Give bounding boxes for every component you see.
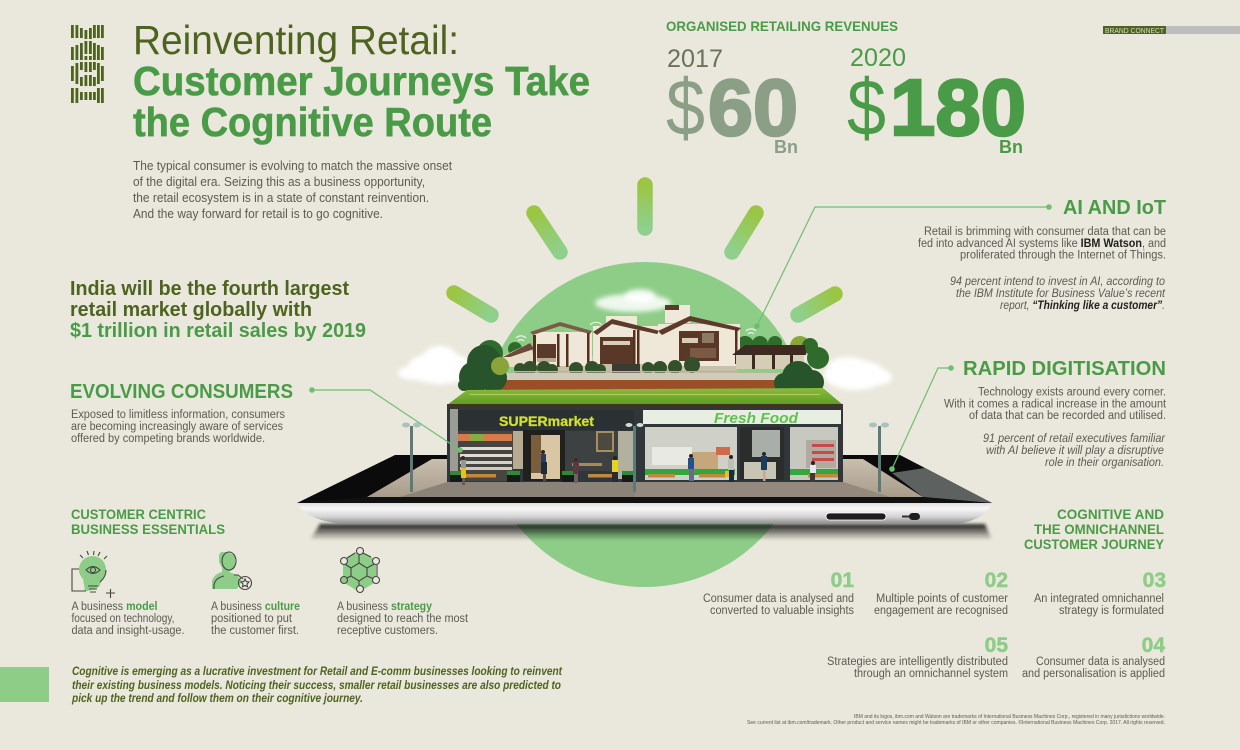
essentials: model: data and insight-usage. [72, 625, 184, 637]
revenue 2017: 2017 [667, 45, 723, 73]
step 05: 05 [985, 634, 1008, 657]
AI and IoT block [918, 197, 1166, 312]
revenue 2020 [847, 44, 1026, 157]
revenue 2017: $ [666, 63, 705, 152]
India market statement [70, 278, 366, 342]
entrance [523, 430, 565, 481]
grass roof [447, 388, 843, 408]
AI and IoT block: 94 percent intend to invest in AI, according to [950, 276, 1166, 288]
legal footer: See current list at ibm.com/trademark. Other product and service names might be trademarks of IBM or other companies. ©International Business Machines Corp. 2017. All rights reserved. [747, 719, 1165, 726]
trees front [458, 345, 824, 394]
essentials: strategy: designed to reach the most [337, 613, 469, 625]
supermarket sign [458, 410, 634, 430]
small left house [503, 343, 536, 367]
trees behind [477, 336, 829, 369]
intro text [133, 159, 452, 221]
revenues heading: ORGANISED RETAILING REVENUES [666, 18, 898, 34]
base wall [515, 356, 737, 374]
rapid digitisation block: With it comes a radical increase in the amount [944, 398, 1167, 410]
icon: light bulb with eye [72, 551, 115, 598]
step 03: 03 [1143, 569, 1166, 592]
icon: strategy hexagon network [340, 548, 380, 592]
omnichannel heading [1024, 507, 1164, 552]
revenue 2017 [666, 45, 798, 157]
title: the Cognitive Route [133, 99, 492, 145]
right window [790, 427, 838, 480]
shrubs [514, 357, 700, 376]
rapid digitisation block: role in their organisation. [1045, 457, 1164, 469]
step 02: Multiple points of customer [876, 593, 1008, 605]
planters and benches [450, 471, 634, 482]
fresh food sign: Fresh Food [714, 410, 799, 427]
AI and IoT block: report, “Thinking like a customer”. [1000, 300, 1165, 312]
closing statement: their existing business models. Noticing their success, smaller retail businesses are also predicted to [72, 680, 561, 692]
rapid digitisation block: Technology exists around every corner. [978, 386, 1166, 398]
step 04: and personalisation is applied [1022, 668, 1165, 680]
closing statement [71, 666, 563, 705]
brand connect tag [1103, 26, 1240, 35]
store building [400, 408, 890, 497]
AI and IoT block: proliferated through the Internet of Things. [960, 250, 1166, 262]
step 01: converted to valuable insights [710, 605, 854, 617]
revenue 2020: 2020 [850, 44, 906, 72]
essentials: strategy [337, 601, 469, 637]
intro text: the retail ecosystem is in a state of constant reinvention. [133, 191, 429, 205]
evolving consumers block: offered by competing brands worldwide. [71, 433, 265, 445]
shadow under tablet [310, 524, 992, 540]
revenue 2020: Bn [999, 137, 1023, 157]
brick bank [490, 380, 780, 391]
fresh food sign [643, 410, 841, 427]
brand connect tag: BRAND CONNECT [1105, 28, 1165, 35]
grocery shelves [458, 431, 513, 481]
evolving consumers block [70, 381, 293, 445]
intro text: of the digital era. Seizing this as a business opportunity, [133, 175, 425, 189]
step 05: through an omnichannel system [854, 668, 1008, 680]
India market statement: $1 trillion in retail sales by 2019 [70, 320, 366, 342]
India market statement: retail market globally with [70, 299, 312, 321]
sun circle [482, 262, 808, 587]
omnichannel heading: COGNITIVE AND [1057, 507, 1164, 522]
revenue 2017: Bn [774, 137, 798, 157]
AI and IoT block: fed into advanced AI systems like IBM Watson, and [918, 238, 1166, 250]
house three [658, 305, 741, 366]
evolving consumers block: are becoming increasingly aware of services [71, 421, 283, 433]
clouds [398, 289, 892, 390]
pavement [400, 482, 890, 497]
essentials: culture [211, 601, 300, 637]
step 03: An integrated omnichannel [1034, 593, 1164, 605]
left window [645, 427, 737, 480]
rapid digitisation block: with AI believe it will play a disruptive [986, 445, 1164, 457]
step 02: 02 [985, 569, 1008, 592]
closing statement: Cognitive is emerging as a lucrative investment for Retail and E-comm businesses looking to reinvent [72, 666, 563, 678]
step 03 [1034, 569, 1166, 617]
supermarket sign: SUPERmarket [499, 413, 594, 429]
step 04: 04 [1142, 634, 1165, 657]
tablet [297, 455, 992, 524]
intro text: The typical consumer is evolving to match the massive onset [133, 159, 452, 173]
omnichannel heading: THE OMNICHANNEL [1034, 522, 1164, 537]
customer centric heading: BUSINESS ESSENTIALS [71, 522, 225, 537]
AI and IoT block: the IBM Institute for Business Value’s recent [956, 288, 1166, 300]
AI and IoT block: Retail is brimming with consumer data that can be [924, 226, 1166, 238]
title [133, 17, 590, 145]
step 05 [827, 634, 1008, 680]
step 02 [874, 569, 1008, 617]
essentials: culture: positioned to put [211, 613, 293, 625]
wifi marks [516, 322, 756, 341]
legal footer [747, 714, 1165, 726]
street lamps [402, 422, 889, 492]
essentials: model [72, 601, 184, 637]
dark feature wall [565, 431, 618, 471]
essentials: strategy: A business strategy [337, 601, 433, 613]
title: Reinventing Retail: [133, 17, 459, 63]
connector: rapid digitisation [890, 366, 953, 471]
title: Customer Journeys Take [133, 58, 590, 104]
pavilion [732, 345, 806, 369]
intro text: And the way forward for retail is to go cognitive. [133, 207, 383, 221]
customer centric heading [71, 507, 225, 537]
step 05: Strategies are intelligently distributed [827, 656, 1008, 668]
evolving consumers block: Exposed to limitless information, consumers [71, 409, 285, 421]
evolving consumers block: EVOLVING CONSUMERS [70, 381, 293, 403]
revenue 2020: $ [847, 63, 886, 152]
rapid digitisation block: of data that can be recorded and utilised. [969, 410, 1166, 422]
rapid digitisation block: 91 percent of retail executives familiar [983, 433, 1166, 445]
sun rays [454, 185, 835, 315]
house one [530, 322, 592, 367]
India market statement: India will be the fourth largest [70, 278, 349, 300]
essentials: culture: the customer first. [211, 625, 299, 637]
railing [503, 371, 783, 380]
essentials: strategy: receptive customers. [337, 625, 438, 637]
closing statement: pick up the trend and follow them on their cognitive journey. [71, 693, 363, 705]
revenue 2020: 180 [890, 63, 1026, 152]
step 01 [703, 569, 854, 617]
step 01: 01 [831, 569, 854, 592]
essentials: model: focused on technology, [72, 613, 174, 625]
essentials: model: A business model [72, 601, 158, 613]
house two [593, 316, 660, 374]
omnichannel heading: CUSTOMER JOURNEY [1024, 537, 1164, 552]
essentials: culture: A business culture [211, 601, 300, 613]
green accent block [0, 667, 49, 702]
AI and IoT block: AI AND IoT [1063, 197, 1166, 219]
right entrance [740, 427, 784, 480]
connector: evolving consumers [310, 388, 462, 452]
step 01: Consumer data is analysed and [703, 593, 854, 605]
step 04 [1022, 634, 1165, 680]
step 02: engagement are recognised [874, 605, 1008, 617]
rapid digitisation block: RAPID DIGITISATION [963, 358, 1166, 380]
customer centric heading: CUSTOMER CENTRIC [71, 507, 206, 522]
rapid digitisation block [944, 358, 1167, 469]
shoppers [461, 450, 816, 485]
step 03: strategy is formulated [1059, 605, 1164, 617]
IBM logo [71, 25, 104, 103]
connector: AI and IoT [755, 205, 1051, 328]
icon: customer with star [212, 552, 252, 590]
revenue 2017: 60 [708, 63, 798, 152]
legal footer: IBM and its logos, ibm.com and Watson are trademarks of International Business Machines Corp., registered in many jurisdictions worldwide. [854, 714, 1165, 720]
step 04: Consumer data is analysed [1036, 656, 1165, 668]
rooftop village [458, 305, 829, 394]
